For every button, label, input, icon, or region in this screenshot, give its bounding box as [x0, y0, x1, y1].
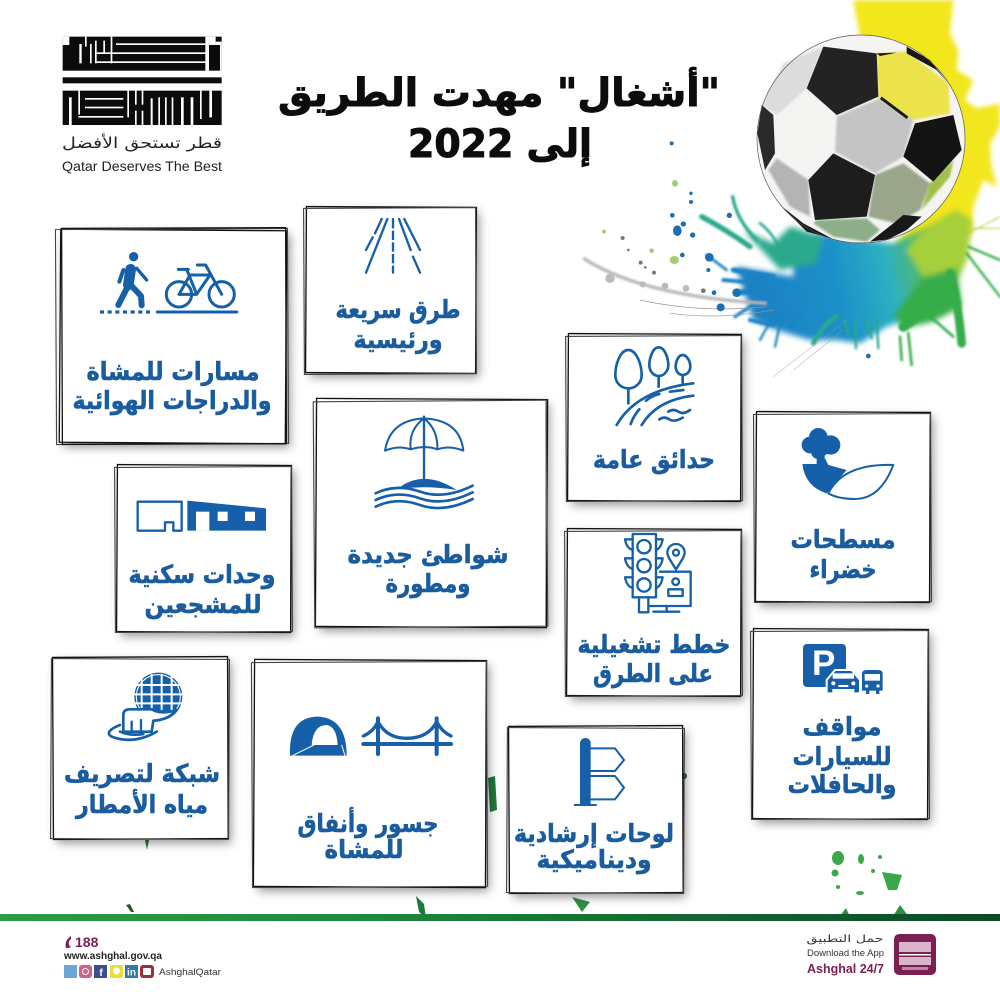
hotline number: 188	[75, 934, 99, 950]
label: شبكة لتصريف	[64, 759, 220, 789]
label line 2: مياه الأمطار	[74, 789, 208, 819]
label line 2: خضراء	[810, 555, 876, 585]
illustration: football with paint splash	[583, 0, 1000, 377]
panel: highways and main roads	[304, 207, 476, 374]
social handle: AshghalQatar	[159, 967, 221, 978]
footer app download block	[806, 934, 936, 976]
label: مواقف	[802, 712, 882, 742]
label: لوحات إرشادية	[514, 819, 674, 849]
label: طرق سريعة	[336, 295, 460, 325]
label: جسور وأنفاق	[298, 807, 438, 839]
panel: dynamic guide signs	[507, 726, 684, 893]
icon: trees on hills	[615, 347, 693, 425]
icon: road lanes	[366, 219, 420, 273]
panel: road operation plans	[565, 529, 742, 696]
label line 2: على الطرق	[593, 659, 713, 689]
label line 2: وديناميكية	[536, 845, 652, 875]
logo arabic tagline: قطر تستحق الأفضل	[62, 133, 222, 152]
panel: green areas	[754, 412, 931, 602]
ball	[757, 35, 965, 243]
icon: tree and leaf	[802, 428, 893, 499]
title: "أشغال" مهدت الطريق	[278, 67, 720, 116]
label line 2: للمشاة	[324, 835, 404, 864]
social icons	[64, 965, 154, 979]
footer green bar	[0, 914, 1000, 921]
icon: beach umbrella and waves	[376, 417, 473, 508]
label line 2: ورئيسية	[354, 325, 442, 355]
app arabic text: حمل التطبيق	[806, 934, 884, 945]
footer contact block	[63, 934, 221, 979]
icon: signpost	[574, 738, 624, 806]
label line 2: ومطورة	[386, 569, 470, 599]
icon: drain grate	[109, 673, 182, 740]
green paint specks	[126, 773, 912, 921]
label: حدائق عامة	[593, 445, 715, 475]
label line 3: والحافلات	[788, 770, 896, 800]
panel: fan housing units	[115, 465, 292, 632]
icon: pedestrian and bicycle	[100, 252, 237, 312]
icon: tunnel and bridge	[290, 717, 451, 756]
label: مسطحات	[790, 525, 896, 554]
logo english tagline: Qatar Deserves The Best	[62, 158, 222, 174]
label line 2: للسيارات	[792, 742, 892, 771]
icon: housing units	[138, 501, 266, 531]
icon: parking sign, car and bus: P	[812, 644, 835, 683]
panel: new beaches	[313, 398, 548, 628]
icon: parking sign, car and bus	[803, 644, 883, 694]
title	[278, 67, 720, 167]
title: إلى 2022	[408, 122, 592, 167]
logo: Ashghal	[62, 37, 222, 174]
panel: public parks	[566, 334, 742, 501]
icon: phone	[66, 936, 71, 948]
label line 2: للمشجعين	[144, 590, 262, 620]
app english text: Download the App	[807, 948, 884, 959]
social icons: f	[99, 968, 103, 979]
social icons: in	[127, 968, 136, 978]
label line 2: والدراجات الهوائية	[72, 386, 272, 416]
panel: rainwater drainage network	[51, 657, 229, 839]
app name: Ashghal 24/7	[807, 961, 884, 976]
label: مسارات للمشاة	[86, 357, 260, 386]
label: وحدات سكنية	[128, 560, 276, 590]
label: شواطئ جديدة	[348, 540, 508, 570]
panel: pedestrian and cycle paths	[55, 228, 289, 445]
panel: bridges and pedestrian tunnels	[251, 659, 488, 888]
icon: app	[894, 934, 936, 975]
panel: car and bus parking	[751, 629, 929, 819]
website: www.ashghal.gov.qa	[63, 950, 162, 962]
icon: traffic light and monitor	[625, 534, 691, 612]
label: خطط تشغيلية	[578, 630, 730, 659]
